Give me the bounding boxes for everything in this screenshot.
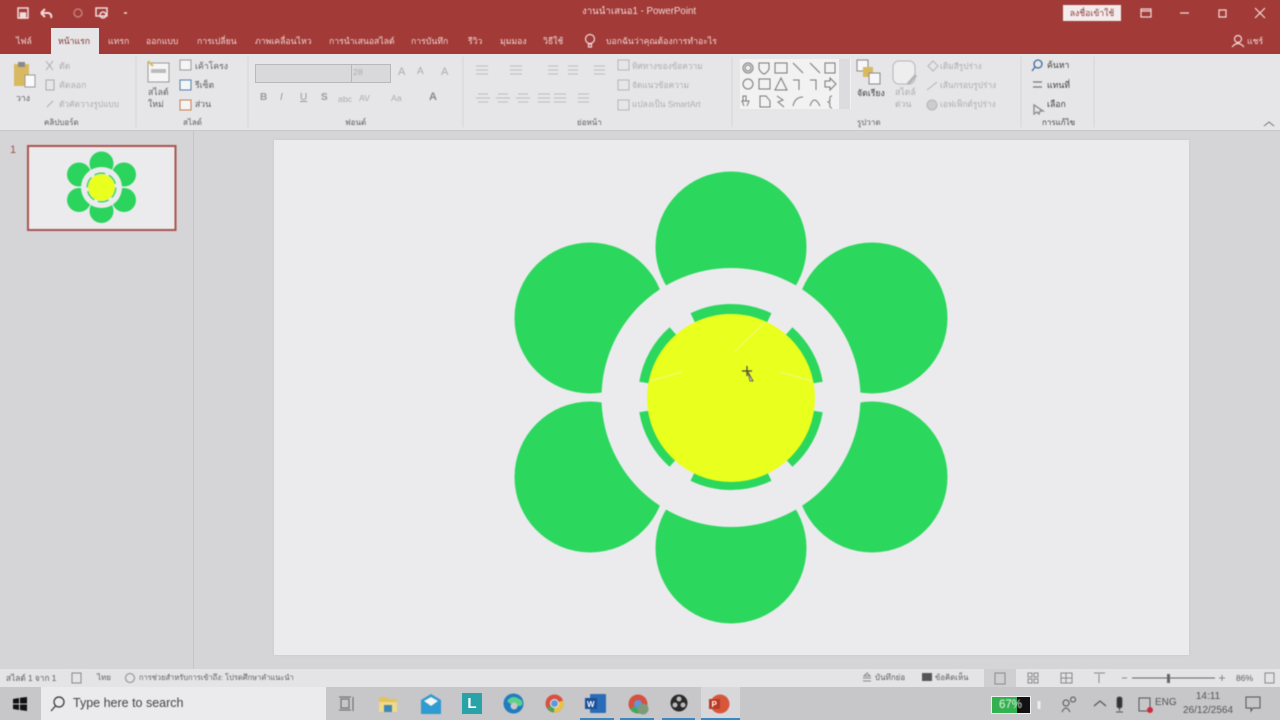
clipboard group: คัดลอก xyxy=(59,80,86,90)
drawing group: รูปวาด xyxy=(857,118,881,127)
new slide icon xyxy=(146,60,170,83)
petals xyxy=(514,172,948,624)
clipboard group xyxy=(13,60,119,127)
chrome icon xyxy=(544,694,564,714)
ribbon xyxy=(0,54,1280,131)
PowerPoint icon xyxy=(708,694,730,714)
ribbon tabs: การบันทึก xyxy=(411,36,448,46)
central light ring xyxy=(602,268,860,527)
ribbon tabs xyxy=(15,28,1264,54)
yellow centre circle xyxy=(647,314,815,482)
ribbon tabs: มุมมอง xyxy=(500,36,527,46)
slide xyxy=(274,140,1189,655)
slide thumbnail xyxy=(26,144,178,232)
L app icon: L xyxy=(467,695,477,712)
slides group: ใหม่ xyxy=(148,99,164,109)
ribbon tabs: ภาพเคลื่อนไหว xyxy=(255,36,312,46)
clock: 26/12/2564 xyxy=(1183,705,1233,716)
ribbon tabs: แชร์ xyxy=(1247,36,1263,46)
drawing group: เอฟเฟ็กต์รูปร่าง xyxy=(940,99,996,109)
faint highlight lines on centre xyxy=(650,322,812,381)
word icon xyxy=(584,693,607,714)
font name and size boxes xyxy=(255,64,352,83)
paragraph group xyxy=(476,59,703,127)
status bar xyxy=(0,669,1280,687)
active tab xyxy=(51,28,99,54)
battery charge level xyxy=(992,697,1017,713)
keyboard language: ENG xyxy=(1155,697,1177,708)
font group: Aa xyxy=(391,93,402,103)
drawing group xyxy=(740,58,996,128)
search placeholder: Type here to search xyxy=(73,696,183,710)
sign in button xyxy=(1063,5,1121,21)
system tray icons xyxy=(1037,696,1154,714)
editing group: แทนที่ xyxy=(1047,80,1070,90)
L app icon xyxy=(462,693,482,714)
ribbon tabs: แทรก xyxy=(108,36,129,46)
paragraph buttons xyxy=(476,65,606,103)
file explorer icon xyxy=(378,696,398,713)
font group: AV xyxy=(359,93,370,103)
clipboard commands: ตัด xyxy=(59,61,70,71)
tab labels: ไฟล์ xyxy=(16,36,32,46)
font style buttons: B xyxy=(260,92,267,103)
search icon xyxy=(50,696,66,712)
arrange button xyxy=(856,58,885,98)
clipboard group: คลิปบอร์ด xyxy=(44,118,79,127)
mail icon xyxy=(420,694,442,715)
ribbon group dividers xyxy=(136,58,1275,127)
flower diagram xyxy=(514,170,948,624)
segmented green ring xyxy=(644,309,818,485)
shapes gallery xyxy=(740,59,851,109)
quick styles button: สไตล์ xyxy=(895,87,916,97)
font group: A xyxy=(417,66,424,77)
quick styles button xyxy=(892,60,918,109)
drawing group: เส้นกรอบรูปร่าง xyxy=(940,80,996,90)
accessibility message: การช่วยสำหรับการเข้าถึง: โปรดศึกษาคำแนะนำ xyxy=(139,673,294,682)
slides group xyxy=(146,59,228,127)
font size buttons: A xyxy=(398,66,405,78)
language: ไทย xyxy=(97,673,111,682)
ribbon tabs: การนำเสนอสไลด์ xyxy=(329,36,395,46)
slides group: ส่วน xyxy=(195,99,211,109)
sign in button: ลงชื่อเข้าใช้ xyxy=(1070,8,1114,18)
document title: งานนำเสนอ1 - PowerPoint xyxy=(582,6,696,17)
zoom percentage: 86% xyxy=(1236,673,1253,683)
notifications icon xyxy=(1244,696,1262,713)
text direction commands: ทิศทางของข้อความ xyxy=(632,61,703,71)
shape format commands: เติมสีรูปร่าง xyxy=(940,61,982,71)
battery percentage: 67% xyxy=(999,699,1022,711)
font group: S xyxy=(321,92,328,103)
comments button: ข้อคิดเห็น xyxy=(935,673,968,682)
paste icon xyxy=(13,61,36,88)
ribbon tabs: หน้าแรก xyxy=(58,36,90,46)
ribbon tabs: วิธีใช้ xyxy=(543,36,563,46)
font group: 28 xyxy=(353,67,363,77)
clock xyxy=(1183,691,1234,716)
slides group: รีเซ็ต xyxy=(195,80,214,90)
taskbar xyxy=(0,687,1280,720)
slide number: 1 xyxy=(10,144,16,156)
task view icon xyxy=(338,696,354,712)
paragraph group: แปลงเป็น SmartArt xyxy=(632,99,701,109)
slides group: สไลด์ xyxy=(183,118,202,127)
editing group: ค้นหา xyxy=(1047,60,1069,70)
window controls xyxy=(1140,7,1266,19)
PowerPoint icon: P xyxy=(712,700,718,709)
font group: I xyxy=(280,92,283,103)
title bar xyxy=(0,0,1280,54)
search box xyxy=(41,687,326,720)
edge icon xyxy=(502,692,524,714)
notes button: บันทึกย่อ xyxy=(875,673,905,682)
font group: U xyxy=(300,92,307,103)
status icons and zoom slider xyxy=(71,672,1275,685)
editing group: เลือก xyxy=(1047,99,1066,109)
lightbulb and share icons xyxy=(584,33,1245,48)
paragraph group: ย่อหน้า xyxy=(577,118,602,127)
font group: abc xyxy=(338,94,352,104)
quick access toolbar icons xyxy=(16,6,128,20)
ribbon tabs: รีวิว xyxy=(468,36,482,46)
paragraph group: จัดแนวข้อความ xyxy=(632,80,689,90)
editing group: การแก้ไข xyxy=(1042,118,1075,127)
font group: A xyxy=(429,91,437,103)
battery meter xyxy=(991,696,1031,714)
clipboard group: ตัวคัดวางรูปแบบ xyxy=(59,99,119,109)
start button xyxy=(12,696,28,712)
word icon: W xyxy=(587,700,595,709)
font group xyxy=(255,64,448,127)
layout commands: เค้าโครง xyxy=(195,61,228,71)
OBS icon xyxy=(670,694,688,712)
ribbon tabs: การเปลี่ยน xyxy=(197,36,237,46)
running app underlines xyxy=(580,718,740,720)
active view highlight xyxy=(984,669,1016,687)
slide count: สไลด์ 1 จาก 1 xyxy=(6,673,56,683)
clipboard group: วาง xyxy=(16,93,30,103)
font group: ฟอนต์ xyxy=(345,118,366,127)
editing commands xyxy=(1031,58,1045,116)
second chrome profile icon xyxy=(628,694,649,715)
ribbon tabs: ออกแบบ xyxy=(146,36,178,46)
clock: 14:11 xyxy=(1196,691,1220,702)
editing group xyxy=(1031,58,1076,127)
font group: A xyxy=(441,66,448,78)
active PowerPoint highlight xyxy=(701,687,740,720)
quick styles button: ด่วน xyxy=(895,99,911,109)
slides group: สไลด์ xyxy=(148,87,169,97)
slide thumbnail panel xyxy=(0,131,194,669)
arrange button: จัดเรียง xyxy=(857,88,885,98)
move cursor xyxy=(742,366,753,381)
ribbon tabs: บอกฉันว่าคุณต้องการทำอะไร xyxy=(606,36,717,46)
